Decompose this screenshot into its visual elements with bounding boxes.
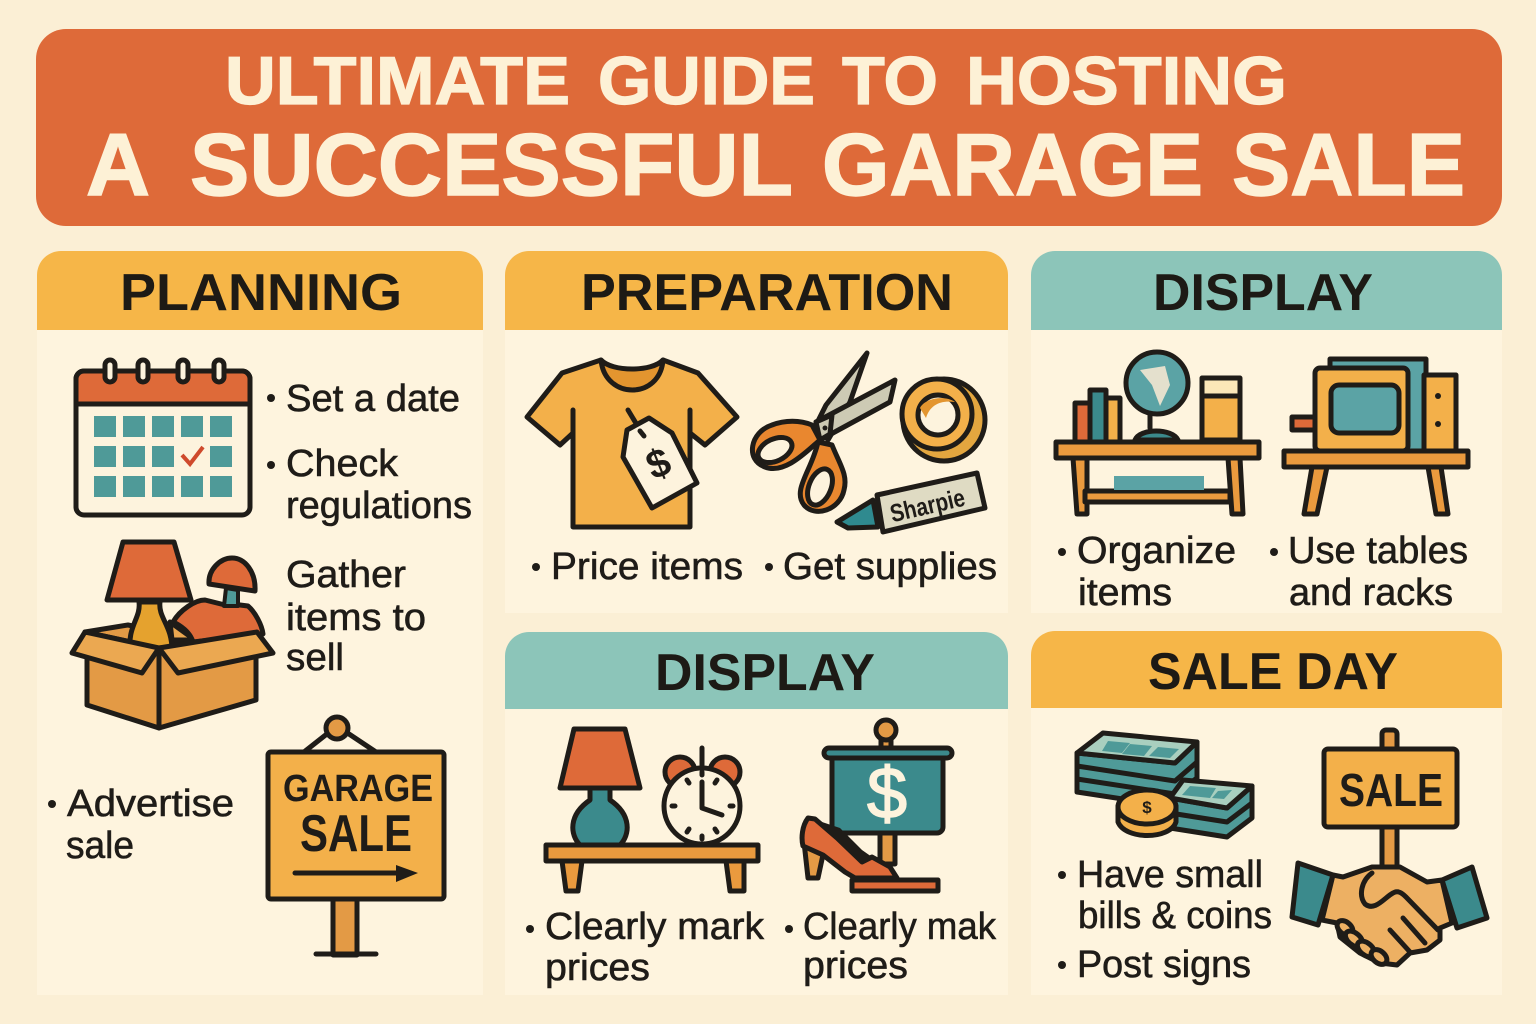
text: check regulations (267, 443, 472, 527)
text: use tables and racks: and racks (1289, 572, 1453, 614)
heading: display: DISPLAY (1153, 264, 1373, 322)
text: advertise sale (48, 783, 234, 867)
text: clearly mak prices: Clearly mak (803, 906, 997, 948)
title banner: ULTIMATE (225, 43, 570, 119)
heading: display: DISPLAY (655, 644, 875, 702)
heading: sale day: SALE DAY (1148, 643, 1398, 701)
icon: price sign and shoe: $ (867, 754, 907, 834)
text: have small bills and coins: bills & coins (1078, 895, 1272, 937)
icon: garage sale sign: SALE (300, 805, 412, 863)
text: clearly mark prices: Clearly mark (545, 906, 765, 948)
title banner: GARAGE (822, 115, 1203, 214)
text: gather items to sell: sell (286, 637, 344, 679)
title banner: SUCCESSFUL (190, 115, 793, 214)
text: organize items (1058, 530, 1236, 614)
text: have small bills and coins: Have small (1077, 854, 1263, 896)
title banner (36, 29, 1502, 226)
text: set a date: Set a date (286, 378, 460, 420)
icon: t-shirt with price tag: $ (640, 440, 677, 489)
panel: display top right (1031, 251, 1502, 614)
icon: t-shirt with price tag (527, 360, 737, 527)
panel: planning (37, 251, 483, 995)
title banner: TO (842, 43, 938, 119)
text: have small bills and coins (1058, 854, 1272, 937)
text: clearly mak prices: prices (803, 945, 908, 987)
heading: preparation: PREPARATION (581, 264, 953, 322)
icon: scissors (752, 353, 895, 511)
text: gather items to sell: Gather (286, 554, 406, 596)
icon: calendar (76, 360, 250, 515)
text: gather items to sell (286, 554, 426, 679)
icon: garage sale sign: GARAGE (283, 768, 433, 810)
text: advertise sale: sale (66, 825, 134, 867)
text: clearly mark prices (526, 906, 765, 989)
text: check regulations: Check (286, 443, 399, 485)
text: clearly mark prices: prices (545, 947, 650, 989)
icon: price sign and shoe (802, 720, 952, 891)
title banner: GUIDE (598, 43, 815, 119)
icon: sharpie marker (837, 473, 985, 532)
panel: display bottom centre (505, 632, 1008, 995)
icon: shelf with globe and books (1056, 352, 1259, 514)
panel: sale day (1031, 631, 1502, 995)
icon: cash and coins: $ (1142, 798, 1152, 817)
heading: planning: PLANNING (120, 264, 402, 322)
text: gather items to sell: items to (286, 597, 426, 639)
text: use tables and racks (1270, 530, 1468, 614)
text: get supplies: Get supplies (783, 546, 997, 588)
text: organize items: Organize (1077, 530, 1236, 572)
title banner: SALE (1232, 115, 1465, 214)
text: organize items: items (1078, 572, 1172, 614)
icon: box of items (72, 542, 273, 728)
title banner: HOSTING (966, 43, 1287, 119)
icon: cash and coins (1077, 733, 1252, 837)
text: post signs: Post signs (1077, 944, 1251, 986)
icon: sale sign with handshake (1292, 730, 1487, 967)
title banner: A (86, 115, 150, 214)
icon: table with appliance (1284, 359, 1468, 514)
text: check regulations: regulations (286, 485, 472, 527)
panel: preparation (505, 251, 1008, 613)
text: use tables and racks: Use tables (1288, 530, 1468, 572)
icon: sharpie marker: Sharpie (887, 484, 968, 528)
text: price items: Price items (551, 546, 743, 588)
icon: sale sign with handshake: SALE (1339, 764, 1443, 816)
text: clearly mak prices (785, 906, 997, 987)
text: advertise sale: Advertise (67, 783, 234, 825)
icon: lamp and clock on shelf (546, 729, 758, 891)
icon: tape roll (902, 379, 985, 461)
icon: garage sale sign (268, 717, 444, 955)
